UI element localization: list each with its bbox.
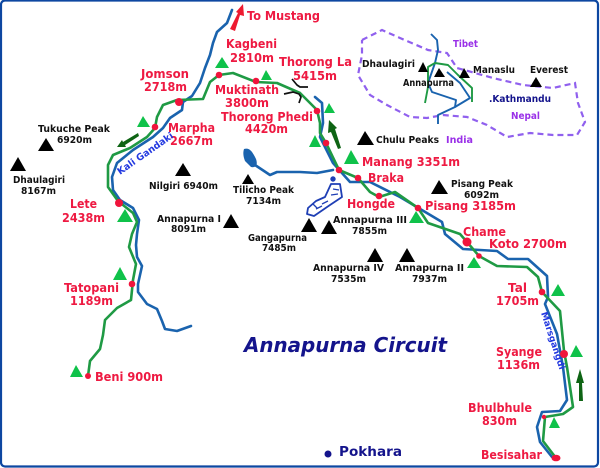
inset locator map: .Kathmandu bbox=[489, 94, 551, 105]
village labels: Chame bbox=[463, 225, 506, 239]
arrow: to Mustang bbox=[230, 4, 244, 31]
peak labels: Gangapurna bbox=[248, 233, 307, 244]
inset labels bbox=[362, 59, 569, 89]
inset labels: Dhaulagiri bbox=[362, 59, 415, 70]
inset locator map bbox=[358, 30, 585, 146]
village labels: Marpha bbox=[168, 121, 215, 135]
peak labels: Annapurna III bbox=[333, 215, 407, 226]
inset locator map: India bbox=[446, 135, 473, 146]
peak labels: Pisang Peak bbox=[451, 179, 514, 190]
village labels: 1189m bbox=[70, 294, 113, 308]
village labels: Pisang 3185m bbox=[425, 199, 516, 213]
peak labels bbox=[13, 124, 514, 285]
village labels: To Mustang bbox=[247, 9, 320, 23]
inset labels: Everest bbox=[530, 65, 569, 76]
village labels: Koto 2700m bbox=[489, 237, 567, 251]
inset rivers bbox=[428, 34, 456, 124]
village labels: Kagbeni bbox=[226, 37, 277, 51]
trekking trail bbox=[88, 73, 573, 458]
title: Annapurna Circuit bbox=[242, 333, 448, 357]
inset labels: Annapurna bbox=[403, 78, 454, 89]
village labels: Thorong La bbox=[279, 55, 352, 69]
village labels: 1705m bbox=[496, 294, 539, 308]
village labels: Hongde bbox=[347, 197, 395, 211]
peak labels: Annapurna IV bbox=[313, 263, 385, 274]
green camp triangles bbox=[70, 57, 583, 428]
mountain pass marks bbox=[284, 79, 308, 103]
village labels: 1136m bbox=[497, 358, 540, 372]
black peak triangles bbox=[10, 131, 448, 262]
peak labels: 7485m bbox=[262, 243, 296, 254]
peak labels: 7535m bbox=[331, 274, 366, 285]
village labels: 2718m bbox=[144, 80, 187, 94]
river label: Kali Gandaki: Kali Gandaki bbox=[115, 131, 176, 177]
village labels: Thorong Phedi bbox=[221, 110, 313, 124]
river label: Marsgangdi: Marsgangdi bbox=[538, 311, 566, 371]
peak labels: Chulu Peaks bbox=[376, 135, 439, 146]
village labels: Jomson bbox=[140, 67, 189, 81]
peak labels: Tilicho Peak bbox=[233, 185, 295, 196]
peak labels: 8091m bbox=[171, 224, 206, 235]
peak labels: Annapurna I bbox=[157, 214, 221, 225]
red village dots bbox=[85, 72, 568, 461]
village labels: 2438m bbox=[62, 211, 105, 225]
village labels: Tal bbox=[508, 281, 527, 295]
inset trail bbox=[425, 63, 472, 103]
peak labels: 6920m bbox=[57, 135, 92, 146]
peak labels: Nilgiri 6940m bbox=[149, 181, 218, 192]
village labels: Muktinath bbox=[215, 83, 279, 97]
village labels: 3800m bbox=[225, 96, 269, 110]
peak labels: 6092m bbox=[464, 190, 499, 201]
arrow: trail direction west bbox=[117, 133, 139, 147]
village labels: 5415m bbox=[293, 69, 337, 83]
village labels: 4420m bbox=[245, 122, 288, 136]
village labels: 2667m bbox=[170, 134, 213, 148]
village labels: Besisahar bbox=[481, 448, 542, 462]
peak labels: 8167m bbox=[21, 186, 56, 197]
village labels: Braka bbox=[368, 171, 404, 185]
arrow: trail direction north bbox=[328, 120, 341, 149]
village labels: Bhulbhule bbox=[468, 401, 532, 415]
village labels: Manang 3351m bbox=[362, 155, 460, 169]
peak labels: 7134m bbox=[246, 196, 281, 207]
peak labels: Tukuche Peak bbox=[38, 124, 111, 135]
Marsyangdi river bbox=[315, 97, 567, 457]
inset locator map: Tibet bbox=[453, 39, 478, 50]
inset locator map: Nepal bbox=[511, 111, 540, 122]
village labels: Tatopani bbox=[64, 281, 119, 295]
village labels: Syange bbox=[496, 345, 542, 359]
inset labels: Manaslu bbox=[473, 65, 515, 76]
Kali Gandaki river bbox=[112, 10, 232, 331]
village labels: Beni 900m bbox=[95, 370, 163, 384]
peak labels: Dhaulagiri bbox=[13, 175, 65, 186]
Tilicho lake and stream bbox=[243, 149, 333, 175]
village labels: Lete bbox=[70, 197, 97, 211]
inset peaks bbox=[418, 62, 428, 72]
Pokhara marker: Pokhara bbox=[339, 445, 402, 460]
village labels: 2810m bbox=[230, 51, 274, 65]
peak labels: 7937m bbox=[412, 274, 447, 285]
Nepal border bbox=[358, 30, 585, 137]
peak labels: Annapurna II bbox=[395, 263, 464, 274]
Annapurna Sanctuary glacier bbox=[307, 177, 342, 216]
peak labels: 7855m bbox=[352, 226, 387, 237]
arrow: trail direction start bbox=[576, 369, 584, 401]
village labels: 830m bbox=[482, 414, 517, 428]
